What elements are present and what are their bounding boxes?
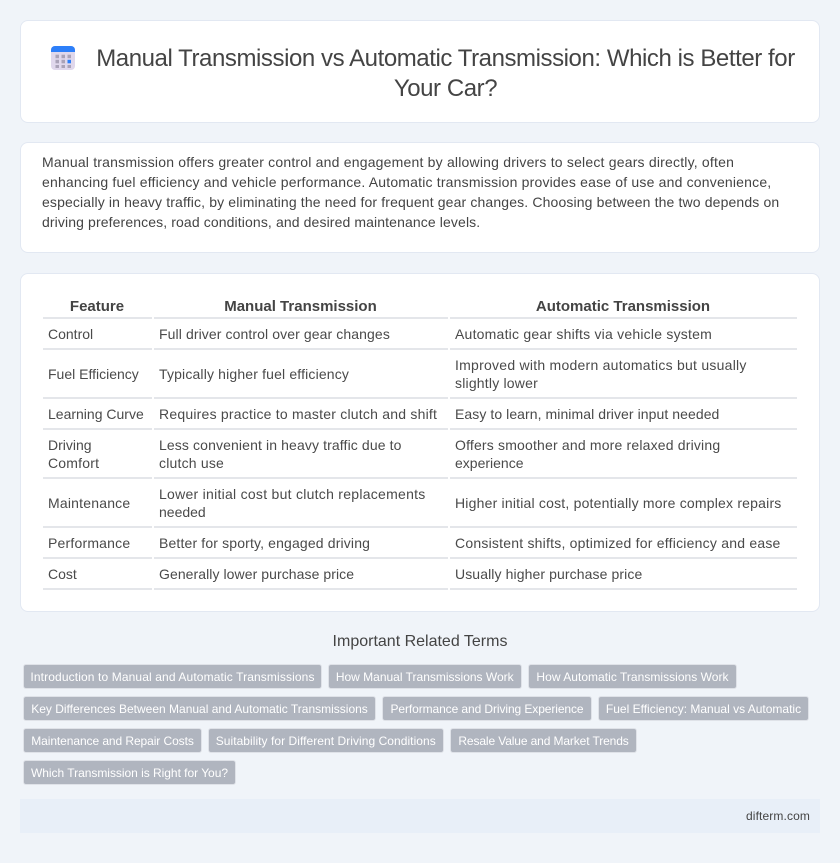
row: cost: Cost: [48, 566, 77, 582]
tag: Performance and Driving Experience: [390, 702, 584, 716]
row: fuel efficiency: slightly lower: [455, 375, 538, 391]
row: control: Full driver control over gear changes: [159, 326, 390, 342]
tag: Key Differences Between Manual and Automatic Transmissions: [31, 702, 368, 716]
row: maintenance: needed: [159, 504, 206, 520]
footer text: difterm.com: [746, 809, 810, 823]
intro text: [42, 154, 779, 230]
row: driving comfort: Driving: [48, 437, 92, 453]
header: feature: Feature: [70, 298, 124, 315]
tag: Fuel Efficiency: Manual vs Automatic: [606, 702, 801, 716]
row: driving comfort: [48, 437, 720, 471]
row: driving comfort: clutch use: [159, 455, 224, 471]
tag: [23, 760, 236, 785]
intro text: enhancing fuel efficiency and vehicle performance. Automatic transmission provides ease of use and convenience,: [42, 174, 771, 190]
intro text: driving preferences, road conditions, and desired maintenance levels.: [42, 214, 480, 230]
tag: [450, 728, 637, 753]
tag: [328, 664, 522, 689]
intro text: Manual transmission offers greater control and engagement by allowing drivers to select gears directly, often: [42, 154, 734, 170]
tag: [382, 696, 592, 721]
header panel: [20, 20, 820, 123]
row: fuel efficiency: Fuel Efficiency: [48, 366, 139, 382]
title: [96, 45, 795, 102]
table: [43, 298, 797, 590]
header: manual: Manual Transmission: [224, 298, 377, 315]
related terms heading: Important Related Terms: [333, 633, 507, 650]
row: cost: Usually higher purchase price: [455, 566, 642, 582]
row: fuel efficiency: [48, 357, 747, 391]
row: driving comfort: experience: [455, 455, 524, 471]
row: fuel efficiency: Improved with modern automatics but usually: [455, 357, 747, 373]
related term tags: [23, 664, 809, 785]
icon: calendar: [51, 46, 75, 70]
tag: [23, 696, 376, 721]
row: driving comfort: Comfort: [48, 455, 99, 471]
tag: Which Transmission is Right for You?: [31, 766, 228, 780]
tag: [23, 664, 322, 689]
row: maintenance: [48, 486, 782, 520]
tag: Introduction to Manual and Automatic Transmissions: [30, 670, 315, 684]
row: learning curve: Learning Curve: [48, 406, 144, 422]
tag: How Manual Transmissions Work: [336, 670, 514, 684]
row: learning curve: Requires practice to master clutch and shift: [159, 406, 437, 422]
tag: [528, 664, 737, 689]
row: maintenance: Maintenance: [48, 495, 130, 511]
header: automatic: Automatic Transmission: [536, 298, 710, 315]
row: learning curve: Easy to learn, minimal driver input needed: [455, 406, 719, 422]
row: maintenance: Higher initial cost, potentially more complex repairs: [455, 495, 782, 511]
tag: Resale Value and Market Trends: [458, 734, 629, 748]
row: control: Control: [48, 326, 93, 342]
row: control: Automatic gear shifts via vehicle system: [455, 326, 712, 342]
row: maintenance: Lower initial cost but clutch replacements: [159, 486, 426, 502]
tag: Maintenance and Repair Costs: [31, 734, 194, 748]
row: performance: Better for sporty, engaged driving: [159, 535, 370, 551]
intro text: especially in heavy traffic, by eliminating the need for frequent gear changes. Choosing between the two depends on: [42, 194, 779, 210]
row: driving comfort: Less convenient in heavy traffic due to: [159, 437, 402, 453]
panel: introduction: [20, 142, 820, 253]
row: fuel efficiency: Typically higher fuel efficiency: [159, 366, 349, 382]
panel: comparison table: [20, 273, 820, 612]
row: performance: Consistent shifts, optimized for efficiency and ease: [455, 535, 781, 551]
row: driving comfort: Offers smoother and more relaxed driving: [455, 437, 720, 453]
row: performance: [48, 535, 781, 551]
row: performance: Performance: [48, 535, 130, 551]
title: Your Car?: [394, 75, 497, 102]
tag: Suitability for Different Driving Conditions: [216, 734, 436, 748]
footer bar: [20, 799, 820, 833]
tag: [208, 728, 444, 753]
tag: [598, 696, 809, 721]
row: control: [48, 326, 712, 342]
row: cost: [48, 566, 642, 582]
tag: How Automatic Transmissions Work: [536, 670, 729, 684]
tag: [23, 728, 202, 753]
title: Manual Transmission vs Automatic Transmission: Which is Better for: [96, 45, 795, 72]
row: cost: Generally lower purchase price: [159, 566, 354, 582]
row: learning curve: [48, 406, 719, 422]
